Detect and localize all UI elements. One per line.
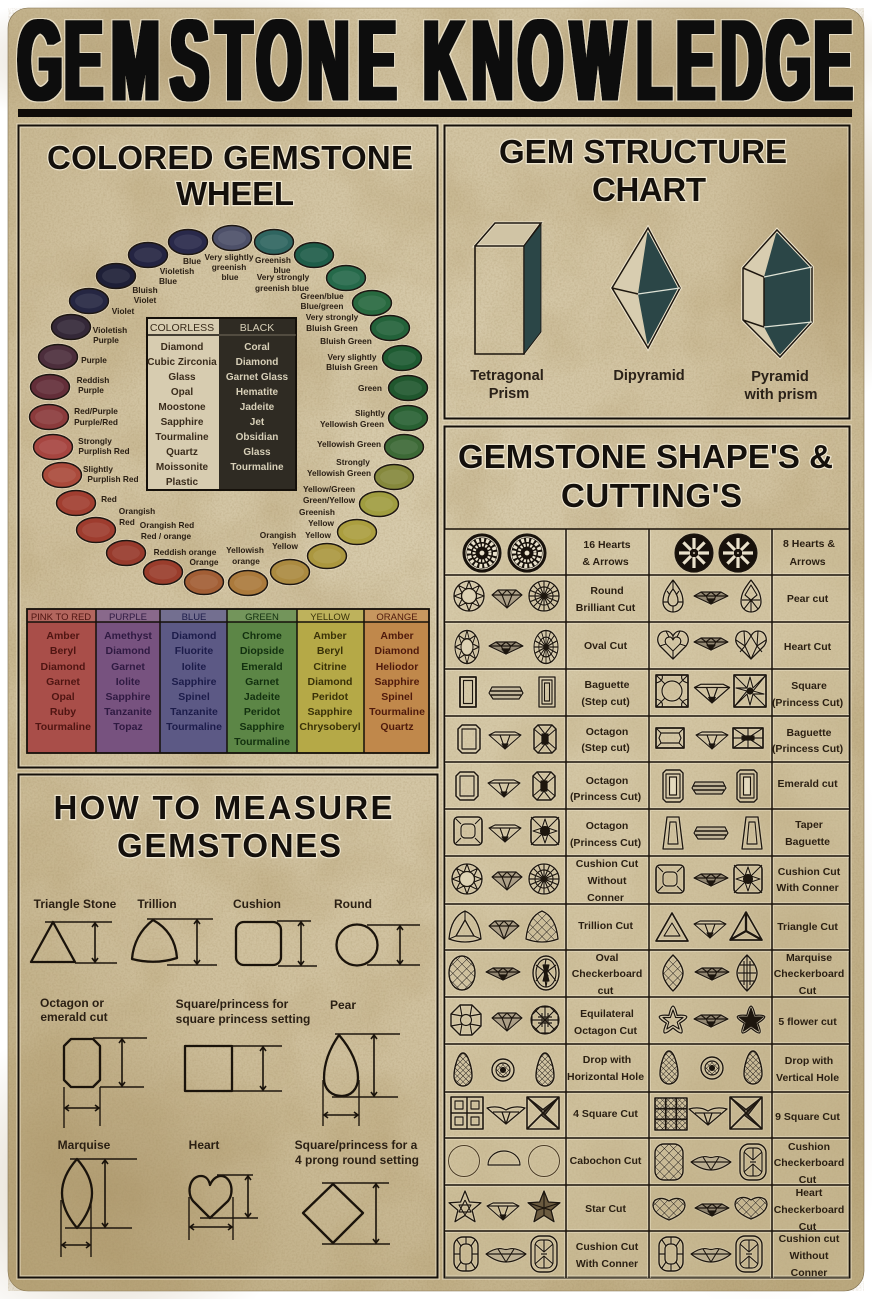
- measure: cushion: [233, 897, 317, 966]
- heading: colored gemstone wheel: WHEEL: [176, 175, 294, 212]
- column: orange: Heliodor: [376, 661, 418, 673]
- column: blue: Iolite: [182, 661, 206, 673]
- wheel colour labels: Very strongly: [257, 272, 310, 282]
- cut names column two: Heart Cut: [784, 641, 832, 653]
- cut names column one: (Step cut): [581, 742, 630, 754]
- wheel colour labels: Violetish: [160, 266, 194, 276]
- cut names column two: Baguette: [785, 836, 830, 848]
- wheel colour labels: Red / orange: [141, 531, 192, 541]
- column: blue: Sapphire: [172, 676, 217, 688]
- column: pink to red: Opal: [51, 691, 75, 703]
- cut names column one: (Princess Cut): [570, 791, 641, 803]
- wheel colour labels: orange: [232, 556, 260, 566]
- cut names column two: Cut: [799, 985, 817, 997]
- column: yellow: Peridot: [312, 691, 349, 703]
- measure: pear: Pear: [330, 998, 356, 1012]
- cut names column one: Drop with: [583, 1054, 631, 1066]
- structure labels: Pyramid: [751, 369, 809, 385]
- measure: heart: [189, 1138, 258, 1240]
- cut names column one: Cushion Cut: [576, 1241, 639, 1253]
- colorless column: Plastic: [166, 477, 199, 488]
- cut names column two: 8 Hearts &: [783, 538, 835, 550]
- column: orange: Tourmaline: [369, 706, 425, 718]
- wheel colour labels: Blue: [159, 276, 177, 286]
- column: green: Sapphire: [240, 721, 285, 733]
- black column: Jadeite: [240, 402, 275, 413]
- wheel colour labels: Reddish: [77, 375, 109, 385]
- wheel colour labels: Orange: [189, 557, 219, 567]
- row: trillion and triangle: [449, 911, 762, 942]
- column: yellow: Chrysoberyl: [299, 721, 361, 733]
- cut names column one: Octagon: [586, 820, 628, 832]
- colorless column: Sapphire: [161, 417, 204, 428]
- wheel colour labels: Strongly: [78, 436, 112, 446]
- row: cushion without and with conner: [452, 864, 762, 894]
- wheel colour labels: Very slightly: [328, 352, 377, 362]
- wheel colour labels: Purplish Red: [78, 446, 130, 456]
- column: pink to red: Tourmaline: [35, 721, 91, 733]
- row: octagon princess and taper: [454, 817, 762, 849]
- column: orange: Spinel: [381, 691, 413, 703]
- column: purple: Sapphire: [106, 691, 151, 703]
- column: orange: ORANGE: [376, 612, 418, 623]
- cut names column two: Vertical Hole: [776, 1072, 839, 1084]
- wheel colour labels: Purple: [81, 355, 107, 365]
- colorless column: Tourmaline: [155, 432, 209, 443]
- column: green: GREEN: [245, 612, 279, 623]
- row: hearts and arrows: [463, 534, 757, 572]
- column: blue: Tourmaline: [166, 721, 222, 733]
- wheel colour labels: Red: [101, 494, 117, 504]
- measure: square princess setting: square princess setting: [176, 1012, 310, 1026]
- wheel colour labels: Purple/Red: [74, 417, 118, 427]
- column: yellow: Sapphire: [308, 706, 353, 718]
- colorless column: Cubic Zirconia: [147, 357, 217, 368]
- cut names column one: & Arrows: [582, 556, 629, 568]
- structure labels: Prism: [489, 386, 529, 402]
- wheel colour labels: Violet: [112, 306, 134, 316]
- heading: how to measure gemstones: HOW TO MEASURE: [54, 789, 392, 826]
- cut names column two: Cushion: [788, 1141, 830, 1153]
- wheel colour labels: Orangish Red: [140, 520, 194, 530]
- column: pink to red: Garnet: [46, 676, 80, 688]
- black column: Jet: [250, 417, 265, 428]
- measure: round: [334, 897, 420, 966]
- wheel colour labels: Very slightly: [205, 252, 254, 262]
- heading: colored gemstone wheel: COLORED GEMSTONE: [47, 139, 413, 176]
- column: green: Chrome: [242, 630, 282, 642]
- wheel colour labels: Yellow: [308, 518, 334, 528]
- column: pink to red: Beryl: [50, 645, 76, 657]
- measure: marquise: [58, 1138, 137, 1257]
- wheel colour labels: Blue: [183, 256, 201, 266]
- column: green: Diopside: [240, 645, 284, 657]
- column: green: Emerald: [241, 661, 283, 673]
- wheel colour labels: Purple: [78, 385, 104, 395]
- colorless column: Moostone: [158, 402, 206, 413]
- cut names column two: Arrows: [789, 556, 826, 568]
- cut names column one: Horizontal Hole: [567, 1071, 644, 1083]
- measure: marquise: Marquise: [58, 1138, 111, 1152]
- cut names column one: cut: [598, 985, 614, 997]
- wheel colour labels: Green/blue: [300, 291, 344, 301]
- wheel colour labels: Bluish Green: [326, 362, 378, 372]
- measure: octagon or emerald cut: [40, 996, 147, 1128]
- cut names column one: (Step cut): [581, 696, 630, 708]
- black column: Hematite: [236, 387, 279, 398]
- wheel colour labels: Purplish Red: [87, 474, 139, 484]
- cut names column two: Conner: [791, 1267, 827, 1279]
- cut names column two: Pear cut: [787, 593, 829, 605]
- cut names column one: Without: [588, 875, 627, 887]
- column: yellow: Diamond: [308, 676, 352, 688]
- title underline bar: [18, 109, 852, 117]
- colorless column: Opal: [171, 387, 193, 398]
- wheel colour labels: Blue/green: [301, 301, 343, 311]
- row: star and heart checkerboard: [449, 1191, 767, 1222]
- cut names column two: Cut: [799, 1174, 817, 1186]
- panel: how to measure gemstones: [18, 774, 438, 1278]
- column: yellow: Amber: [313, 630, 347, 642]
- cut names column one: Octagon Cut: [574, 1025, 638, 1037]
- column: purple: Amethyst: [104, 630, 152, 642]
- wheel colour labels: Very strongly: [306, 312, 359, 322]
- structure labels: Dipyramid: [613, 368, 685, 384]
- column: blue: BLUE: [182, 612, 206, 623]
- structure labels: with prism: [744, 387, 818, 403]
- title: GEMSTONE KNOWLEDGE: [18, 0, 852, 125]
- cut names column one: Cushion Cut: [576, 858, 639, 870]
- column: pink to red: Ruby: [50, 706, 76, 718]
- column: green: Jadeite: [244, 691, 280, 703]
- column: purple: Diamond: [106, 645, 150, 657]
- heading: gem structure chart: CHART: [592, 171, 706, 208]
- wheel colour labels: Yellow/Green: [303, 484, 355, 494]
- cut names column two: Without: [790, 1250, 829, 1262]
- wheel colour labels: [74, 252, 385, 567]
- cut names column one: With Conner: [576, 1258, 638, 1270]
- measure: pear: [323, 998, 400, 1126]
- wheel colour labels: Purple: [93, 335, 119, 345]
- cut names column two: Baguette: [787, 727, 832, 739]
- column: green: Garnet: [245, 676, 279, 688]
- cut names column two: 5 flower cut: [778, 1016, 837, 1028]
- cut names column one: Oval Cut: [584, 640, 628, 652]
- column: orange: Sapphire: [375, 676, 420, 688]
- cut names column two: Square: [791, 680, 827, 692]
- cut names column two: Heart: [796, 1187, 823, 1199]
- measure: octagon or emerald cut: Octagon or: [40, 996, 104, 1010]
- wheel colour labels: Yellow: [305, 530, 331, 540]
- wheel colour labels: Slightly: [355, 408, 385, 418]
- column: green: Tourmaline: [234, 736, 290, 748]
- colorless column: Quartz: [166, 447, 198, 458]
- measure: cushion: Cushion: [233, 897, 281, 911]
- column: orange: Amber: [380, 630, 414, 642]
- measure: triangle stone: [31, 897, 117, 963]
- column: yellow: Beryl: [317, 645, 343, 657]
- cut names column two: Emerald cut: [777, 778, 838, 790]
- row: cabochon and cushion checkerboard: [448, 1144, 766, 1180]
- wheel colour labels: greenish blue: [255, 283, 309, 293]
- colorless column: Diamond: [161, 342, 203, 353]
- colorless column: COLORLESS: [150, 322, 214, 334]
- wheel colour labels: Slightly: [83, 464, 113, 474]
- row: drop with horizontal and vertical hole: [454, 1051, 762, 1086]
- cut names column one: (Princess Cut): [570, 837, 641, 849]
- row: oval and heart: [455, 630, 766, 664]
- column: blue: Tanzanite: [170, 706, 218, 718]
- icon: dipyramid: [612, 228, 680, 348]
- row: octagon princess and emerald: [456, 770, 757, 802]
- icon: tetragonal prism: [475, 223, 541, 354]
- measure: square princess four prong setting: Square/princess for a: [295, 1138, 418, 1152]
- wheel colour labels: Red/Purple: [74, 406, 118, 416]
- heading: gemstone shapes and cuttings: CUTTING'S: [561, 477, 742, 514]
- cut names column two: Cushion Cut: [778, 866, 841, 878]
- colorless column: Moissonite: [156, 462, 209, 473]
- cut names column one: Checkerboard: [572, 968, 642, 980]
- wheel colour labels: Green: [358, 383, 382, 393]
- column: yellow: Citrine: [313, 661, 347, 673]
- wheel colour labels: Yellowish Green: [320, 419, 384, 429]
- row: cushion with and without conner: [454, 1236, 762, 1272]
- black column: Diamond: [236, 357, 278, 368]
- column: purple: Topaz: [113, 721, 143, 733]
- row: octagon step and baguette princess: [458, 725, 763, 753]
- cut names column one: Star Cut: [585, 1203, 626, 1215]
- wheel colour labels: Reddish orange: [154, 547, 217, 557]
- column: blue: Spinel: [178, 691, 210, 703]
- cut names column one: 16 Hearts: [583, 539, 631, 551]
- cut names column two: Checkerboard: [774, 968, 844, 980]
- cut names column one: Trillion Cut: [578, 920, 633, 932]
- column: purple: Tanzanite: [104, 706, 152, 718]
- wheel colour labels: Yellowish: [226, 545, 264, 555]
- column: yellow: YELLOW: [310, 612, 350, 623]
- measure: square princess setting: Square/princess for: [176, 997, 289, 1011]
- column: purple: Garnet: [111, 661, 145, 673]
- measure: octagon or emerald cut: emerald cut: [40, 1010, 108, 1024]
- wheel colour labels: blue: [221, 272, 239, 282]
- wheel colour labels: Bluish: [132, 285, 158, 295]
- wheel colour labels: Orangish: [260, 530, 296, 540]
- wheel colour labels: Violetish: [93, 325, 127, 335]
- wheel colour labels: Yellowish Green: [317, 439, 381, 449]
- cut names column two: 9 Square Cut: [775, 1111, 840, 1123]
- measure: triangle stone: Triangle Stone: [34, 897, 117, 911]
- wheel colour labels: Green/Yellow: [303, 495, 356, 505]
- wheel colour labels: blue: [273, 265, 291, 275]
- cut names column two: With Conner: [776, 882, 839, 894]
- heading: gem structure chart: GEM STRUCTURE: [499, 133, 787, 170]
- column: green: Peridot: [244, 706, 281, 718]
- cut names column two: Marquise: [786, 952, 832, 964]
- column: pink to red: Diamond: [41, 661, 85, 673]
- row: baguette and square: [460, 675, 766, 707]
- wheel colour labels: Yellowish Green: [307, 468, 371, 478]
- wheel colour labels: Yellow: [272, 541, 298, 551]
- wheel colour labels: greenish: [212, 262, 246, 272]
- wheel colour labels: Violet: [134, 295, 156, 305]
- column: pink to red: Amber: [46, 630, 80, 642]
- heading: gemstone shapes and cuttings: GEMSTONE SHAPE'S &: [458, 438, 833, 475]
- wheel colour labels: Strongly: [336, 457, 370, 467]
- column: pink to red: PINK TO RED: [31, 612, 91, 623]
- wheel colour labels: Greenish: [299, 507, 335, 517]
- row: 4 square and 9 square: [451, 1097, 762, 1130]
- cut names column one: Cabochon Cut: [570, 1155, 642, 1167]
- cut names column one: Oval: [596, 952, 618, 964]
- table grid: [445, 529, 849, 1278]
- wheel colour labels: Greenish: [255, 255, 291, 265]
- panel: gem structure chart: [444, 126, 850, 418]
- column: orange: Quartz: [380, 721, 414, 733]
- black column: Tourmaline: [230, 462, 284, 473]
- panel: colored gemstone wheel: [18, 126, 438, 768]
- cut names column one: Round: [590, 585, 624, 597]
- cut names column two: (Princess Cut): [772, 697, 843, 709]
- structure labels: Tetragonal: [470, 368, 544, 384]
- cut names column two: Drop with: [785, 1055, 833, 1067]
- measure: square princess four prong setting: 4 prong round setting: [295, 1153, 419, 1167]
- row: oval and marquise checkerboard: [449, 955, 757, 991]
- centre table: colorless and black gems: [147, 318, 296, 490]
- heading: how to measure gemstones: GEMSTONES: [117, 827, 341, 864]
- column: blue: Fluorite: [175, 645, 213, 657]
- black column: BLACK: [240, 322, 274, 334]
- column: orange: Diamond: [375, 645, 419, 657]
- wheel colour labels: Bluish Green: [306, 323, 358, 333]
- measure: square princess setting: [176, 997, 310, 1091]
- colorless column: Glass: [168, 372, 196, 383]
- column: blue: Diamond: [172, 630, 216, 642]
- black column: Garnet Glass: [226, 372, 289, 383]
- cut names column one: Conner: [587, 892, 624, 904]
- measure: trillion: Trillion: [137, 897, 177, 911]
- row: equilateral octagon and 5 flower: [451, 1005, 765, 1035]
- black column: Obsidian: [236, 432, 278, 443]
- black column: Glass: [243, 447, 271, 458]
- cut names column two: Taper: [795, 819, 823, 831]
- measure: round: Round: [334, 897, 372, 911]
- measure: heart: Heart: [189, 1138, 219, 1152]
- icon: pyramid with prism: [743, 230, 812, 357]
- cut names column two: Checkerboard: [774, 1204, 844, 1216]
- cut names column one: Brilliant Cut: [576, 602, 636, 614]
- cut names column two: Cut: [799, 1221, 817, 1233]
- row: round brilliant and pear: [454, 580, 761, 612]
- wheel colour labels: Red: [119, 517, 135, 527]
- measure: square princess four prong setting: [295, 1138, 419, 1244]
- cut names column one: Equilateral: [580, 1008, 634, 1020]
- wheel colour labels: Orangish: [119, 506, 155, 516]
- gem colour wheel: [28, 224, 428, 596]
- black column: Coral: [244, 342, 270, 353]
- wheel colour labels: Bluish Green: [320, 336, 372, 346]
- measure: trillion: [132, 897, 217, 965]
- column: purple: Iolite: [116, 676, 140, 688]
- cut names column one: 4 Square Cut: [573, 1108, 638, 1120]
- cut names column two: (Princess Cut): [772, 743, 843, 755]
- panel: gemstone shapes and cuttings: [444, 426, 850, 1279]
- cut names column two: Triangle Cut: [777, 921, 838, 933]
- cut names column one: Baguette: [585, 679, 630, 691]
- cut names column two: Checkerboard: [774, 1157, 844, 1169]
- cut names column one: Octagon: [586, 726, 628, 738]
- cut names column two: Cushion cut: [779, 1233, 840, 1245]
- cut names column one: Octagon: [586, 775, 628, 787]
- column: purple: PURPLE: [109, 612, 147, 623]
- colour group table: [27, 609, 429, 753]
